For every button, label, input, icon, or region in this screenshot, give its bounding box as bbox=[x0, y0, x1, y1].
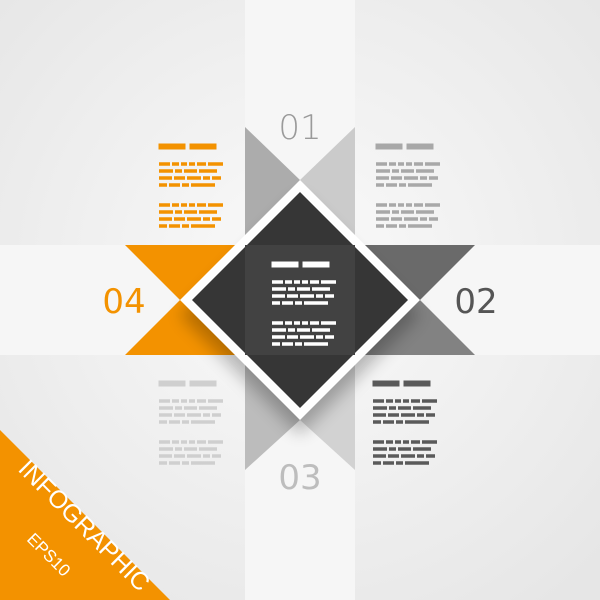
number 02: 02 bbox=[454, 282, 498, 322]
text block bottom-left bbox=[159, 381, 223, 463]
central diamond bbox=[180, 180, 420, 435]
horizontal band bbox=[0, 245, 600, 355]
number 01: 01 bbox=[278, 108, 322, 148]
arm 03 bbox=[245, 355, 355, 470]
arm 01 bbox=[245, 127, 355, 245]
vertical band bbox=[245, 0, 355, 600]
center text block bbox=[272, 262, 336, 344]
number 04: 04 bbox=[102, 282, 146, 322]
arm 04 bbox=[125, 245, 245, 355]
corner banner: INFOGRAPHIC bbox=[13, 454, 155, 597]
text block top-left bbox=[159, 144, 223, 226]
arm 02 bbox=[355, 245, 475, 355]
corner banner: EPS10 bbox=[23, 529, 74, 580]
number 03: 03 bbox=[278, 458, 322, 498]
text block top-right bbox=[376, 144, 440, 226]
text block bottom-right bbox=[373, 381, 437, 463]
